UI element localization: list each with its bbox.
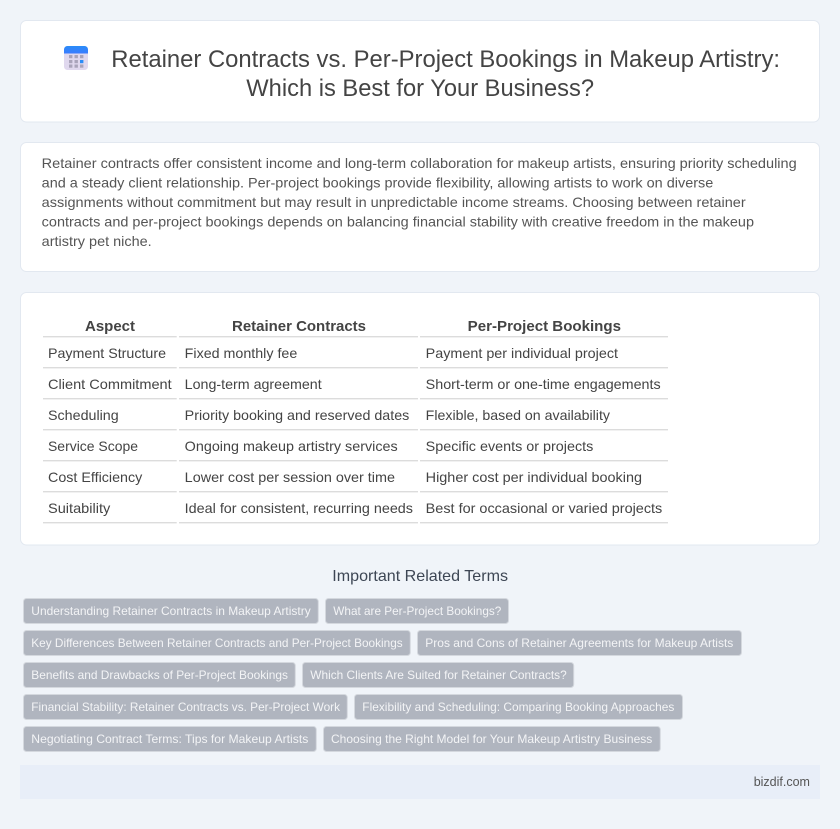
heading: important related terms: Important Related Terms [332, 568, 508, 585]
chip: flexibility and scheduling [354, 694, 682, 720]
table row: client commitment: Long-term agreement [185, 376, 322, 392]
text block: summary: Retainer contracts offer consistent income and long-term collaboration for makeup artists, ensuring priority scheduling [42, 155, 797, 171]
chip: financial stability: Financial Stability: Retainer Contracts vs. Per-Project Work [31, 700, 341, 714]
table row: scheduling: Scheduling [48, 407, 119, 423]
chip: choosing the right model [324, 726, 660, 752]
text block: summary [42, 155, 797, 249]
chip: per-project bookings [326, 598, 508, 624]
chip: pros and cons [418, 630, 742, 656]
table row: cost efficiency: Cost Efficiency [48, 469, 142, 485]
table row: scheduling [43, 407, 668, 430]
title: Retainer Contracts vs. Per-Project Bookings in Makeup Artistry: [111, 46, 780, 73]
footer [20, 765, 820, 799]
icon: calendar [64, 46, 88, 70]
chip: per-project bookings: What are Per-Project Bookings? [333, 604, 502, 618]
chip: negotiating contract terms [24, 726, 316, 752]
chip: which clients [302, 662, 574, 688]
footer source text: bizdif.com [754, 774, 810, 789]
chip: pros and cons: Pros and Cons of Retainer Agreements for Makeup Artists [425, 636, 733, 650]
panel: comparison table [20, 292, 820, 545]
panel: title header [20, 20, 820, 122]
table row: suitability: Best for occasional or varied projects [426, 500, 662, 516]
table row: payment structure: Payment Structure [48, 345, 166, 361]
table row: suitability: Ideal for consistent, recurring needs [185, 500, 413, 516]
table row: suitability [43, 500, 668, 523]
table row: payment structure: Fixed monthly fee [185, 345, 298, 361]
title [111, 46, 780, 102]
table row: payment structure: Payment per individual project [426, 345, 618, 361]
table row: cost efficiency: Lower cost per session over time [185, 469, 395, 485]
chip: financial stability [24, 694, 347, 720]
table row: client commitment: Short-term or one-time engagements [426, 376, 661, 392]
chip: negotiating contract terms: Negotiating Contract Terms: Tips for Makeup Artists [31, 732, 308, 746]
chip: understanding retainer contracts: Understanding Retainer Contracts in Makeup Artistry [31, 604, 311, 618]
table header row: Per-Project Bookings [468, 318, 621, 335]
table row: client commitment [43, 376, 668, 399]
table header row [43, 318, 668, 337]
table row: suitability: Suitability [48, 500, 110, 516]
table row: service scope [43, 438, 668, 461]
table header row: Aspect [85, 318, 135, 335]
chip: key differences: Key Differences Between Retainer Contracts and Per-Project Bookings [31, 636, 403, 650]
text block: summary: and a steady client relationship. Per-project bookings provide flexibility, allowing artists to work on diverse [42, 174, 714, 190]
table header row: Retainer Contracts [232, 318, 366, 335]
chip: choosing the right model: Choosing the Right Model for Your Makeup Artistry Business [331, 732, 652, 746]
table row: service scope: Ongoing makeup artistry services [185, 438, 398, 454]
table row: client commitment: Client Commitment [48, 376, 172, 392]
panel: summary paragraph [20, 142, 820, 272]
title: Which is Best for Your Business? [246, 75, 594, 102]
chip: key differences [24, 630, 410, 656]
table row: cost efficiency: Higher cost per individual booking [426, 469, 642, 485]
chip: flexibility and scheduling: Flexibility and Scheduling: Comparing Booking Approaches [362, 700, 674, 714]
chip: benefits and drawbacks [24, 662, 295, 688]
chip: which clients: Which Clients Are Suited for Retainer Contracts? [310, 668, 567, 682]
table row: service scope: Specific events or projects [426, 438, 593, 454]
table row: scheduling: Flexible, based on availability [426, 407, 610, 423]
table row: scheduling: Priority booking and reserved dates [185, 407, 409, 423]
table row: payment structure [43, 345, 668, 368]
chip: benefits and drawbacks: Benefits and Drawbacks of Per-Project Bookings [31, 668, 288, 682]
table row: service scope: Service Scope [48, 438, 138, 454]
chip: understanding retainer contracts [24, 598, 318, 624]
table row: cost efficiency [43, 469, 668, 492]
related terms chips [24, 598, 742, 752]
text block: summary: artistry pet niche. [42, 233, 152, 249]
text block: summary: contracts and per-project bookings depends on balancing financial stability with creative freedom in the makeup [42, 213, 754, 229]
text block: summary: assignments without commitment but may result in unpredictable income streams. Choosing between retainer [42, 194, 746, 210]
